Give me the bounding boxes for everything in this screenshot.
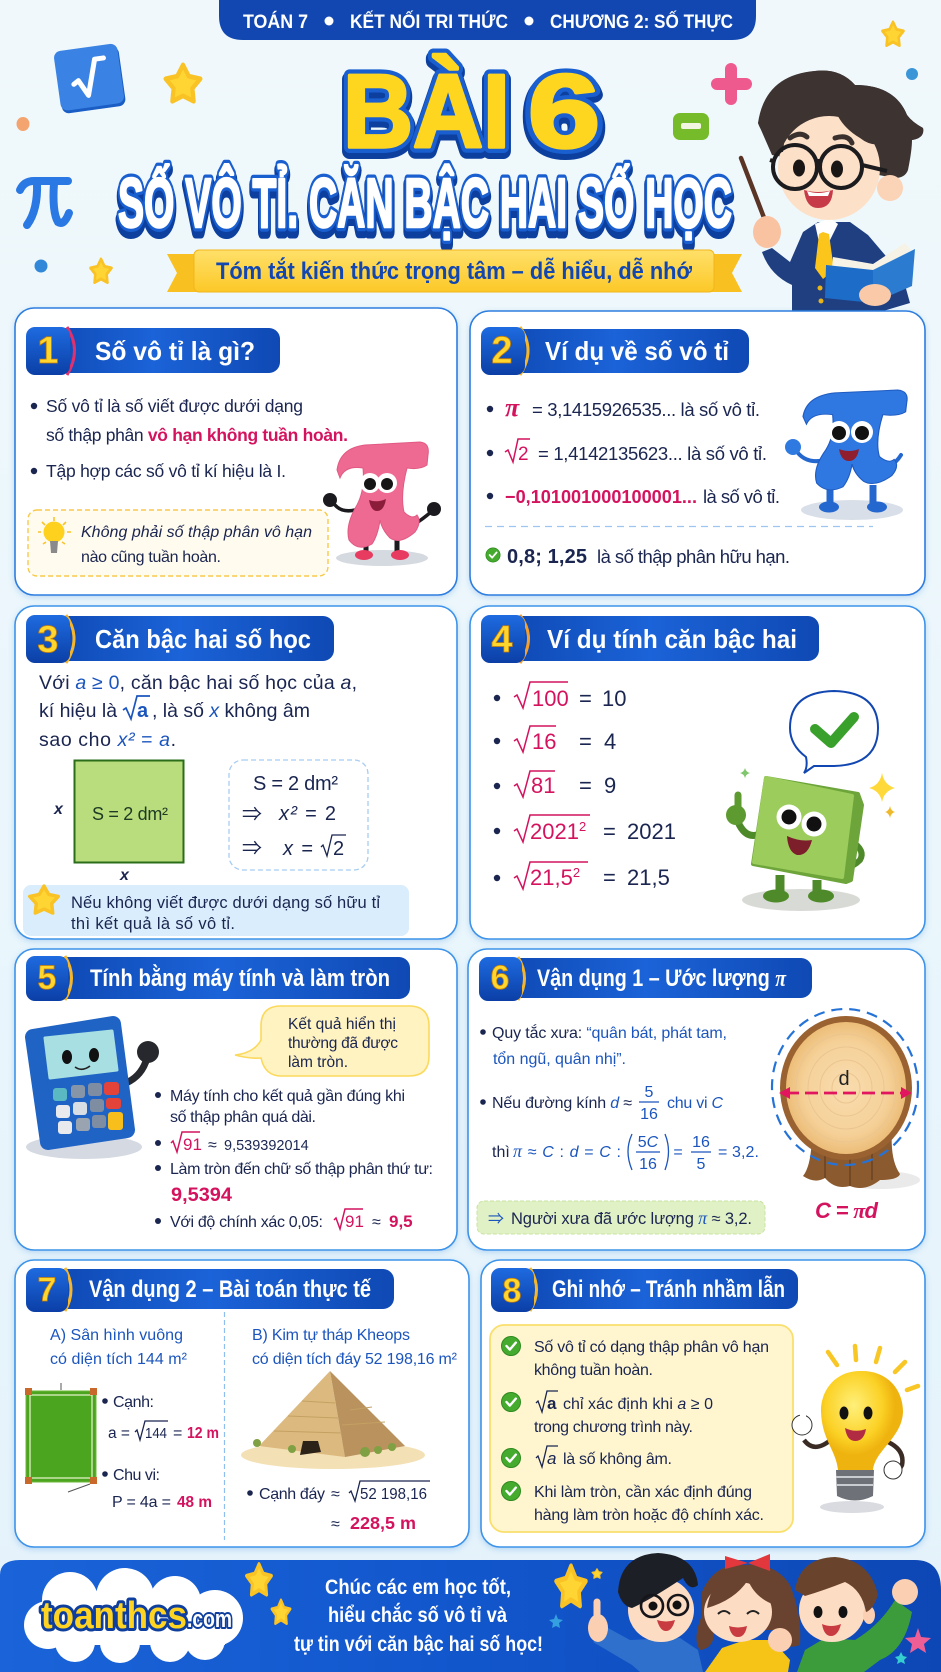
closing message: tự tin với căn bậc hai số học! bbox=[294, 1633, 543, 1656]
top banner: course info: CHƯƠNG 2: SỐ THỰC bbox=[550, 11, 733, 33]
character: pink pi bbox=[323, 442, 441, 566]
root examples: 2 bbox=[579, 819, 586, 834]
calculator notes: 9,539392014 bbox=[224, 1138, 309, 1154]
title: lesson number: 6 bbox=[528, 54, 600, 170]
examples list: 2 bbox=[518, 444, 529, 465]
section header bbox=[26, 615, 334, 663]
section header: Tính bằng máy tính và làm tròn bbox=[90, 964, 390, 992]
character: boy in green hoodie bbox=[795, 1557, 918, 1672]
root examples: 81 bbox=[531, 773, 555, 798]
examples list: = 3,1415926535... là số vô tỉ. bbox=[532, 399, 760, 420]
top banner: course info: KẾT NỐI TRI THỨC bbox=[350, 11, 508, 33]
root examples: 9 bbox=[604, 773, 616, 798]
subtitle ribbon: Tóm tắt kiến thức trọng tâm – dễ hiểu, dễ nhớ bbox=[216, 257, 693, 285]
section header bbox=[479, 957, 812, 1001]
eyes bbox=[793, 160, 843, 178]
part B answers bbox=[247, 1481, 430, 1533]
section header: 1 bbox=[37, 330, 59, 372]
glasses bbox=[770, 145, 887, 189]
callout: note: nào cũng tuần hoàn. bbox=[81, 549, 221, 566]
calculator notes: Với độ chính xác 0,05: bbox=[170, 1214, 323, 1231]
calculator notes: 9,5394 bbox=[171, 1185, 232, 1206]
reminders box bbox=[490, 1325, 793, 1532]
speech bubble with check bbox=[790, 691, 878, 773]
footer bbox=[0, 1553, 941, 1672]
calculator notes: 9,5 bbox=[389, 1212, 413, 1231]
title: lesson number: 6 bbox=[528, 54, 600, 170]
character: boy with glasses bbox=[588, 1553, 703, 1672]
illustration: tree log with diameter: d bbox=[838, 1068, 850, 1090]
old rule text: Quy tắc xưa: “quân bát, phát tam, bbox=[492, 1023, 727, 1042]
top banner: course info: TOÁN 7 bbox=[243, 11, 308, 33]
calculator notes bbox=[155, 1088, 433, 1231]
icon: star bbox=[166, 65, 200, 101]
title: lesson number: BÀI bbox=[343, 54, 510, 170]
icon: plus sign bbox=[717, 69, 746, 99]
calculator notes: số thập phân quá dài. bbox=[170, 1109, 316, 1126]
part A answers bbox=[102, 1394, 219, 1511]
stars bbox=[247, 1564, 931, 1664]
root examples: 16 bbox=[532, 729, 556, 754]
part B heading bbox=[252, 1327, 458, 1368]
definition list bbox=[31, 396, 348, 481]
panel frame bbox=[15, 949, 457, 1250]
speech bubble: thường đã được bbox=[288, 1035, 398, 1052]
reminders box: a bbox=[547, 1394, 557, 1413]
section header bbox=[491, 1268, 798, 1312]
panel 2 bbox=[470, 311, 925, 595]
part A heading bbox=[50, 1327, 188, 1368]
panel frame bbox=[15, 1260, 469, 1547]
old rule text: Nếu đường kính d ≈ bbox=[492, 1095, 632, 1112]
root examples: 21,5 bbox=[530, 865, 573, 890]
note: star tip bbox=[23, 885, 409, 936]
definition list: Số vô tỉ là số viết được dưới dạng bbox=[46, 396, 303, 416]
calculator notes: Làm tròn đến chữ số thập phân thứ tư: bbox=[170, 1161, 433, 1178]
back hair bbox=[758, 71, 923, 178]
jacket buttons bbox=[818, 286, 824, 304]
old rule text: tổn ngũ, quân nhị”. bbox=[493, 1050, 626, 1068]
hand with pointer bbox=[753, 216, 781, 248]
definition text bbox=[39, 672, 357, 751]
character: calculator bbox=[26, 1024, 159, 1159]
section header: 3 bbox=[37, 619, 59, 661]
closing message bbox=[294, 1576, 543, 1656]
section header bbox=[481, 615, 819, 663]
old rule text: 5 bbox=[645, 1084, 654, 1101]
section header: Vận dụng 2 – Bài toán thực tế bbox=[89, 1276, 372, 1303]
diagram: green square bbox=[53, 760, 184, 884]
finite decimal note: là số thập phân hữu hạn. bbox=[597, 546, 790, 567]
panel 8 bbox=[481, 1260, 925, 1547]
definition list: số thập phân vô hạn không tuần hoàn. bbox=[46, 425, 348, 445]
root examples: 10 bbox=[602, 686, 626, 711]
divider bbox=[485, 526, 873, 528]
estimate of pi formula: 5C bbox=[638, 1134, 659, 1151]
logo cloud: toanthcs bbox=[41, 1595, 187, 1637]
part A answers: 48 m bbox=[177, 1494, 212, 1511]
panel frame bbox=[15, 308, 457, 595]
callout: note: Không phải số thập phân vô hạn bbox=[81, 524, 312, 541]
root examples bbox=[494, 682, 676, 890]
top banner: course info bbox=[219, 0, 756, 40]
icon: light bulb bbox=[38, 517, 71, 553]
illustration: pyramid bbox=[241, 1371, 425, 1469]
examples list bbox=[487, 393, 780, 507]
part A heading: có diện tích 144 m² bbox=[50, 1351, 188, 1368]
estimate of pi formula: 16 bbox=[639, 1156, 657, 1173]
conclusion box bbox=[477, 1201, 765, 1234]
section header: Ví dụ về số vô tỉ bbox=[545, 336, 729, 366]
title: lesson number: 6 bbox=[528, 58, 600, 174]
icon: minus tile bbox=[673, 113, 709, 140]
character: blue pi bbox=[785, 390, 907, 520]
icon: square root tile bbox=[53, 43, 126, 114]
part A answers: = bbox=[173, 1425, 182, 1442]
old rule text bbox=[480, 1023, 727, 1123]
part A answers: 144 bbox=[145, 1426, 167, 1442]
character: teacher bbox=[741, 71, 923, 312]
calculator notes: 91 bbox=[183, 1135, 202, 1154]
box: worked steps bbox=[229, 760, 368, 870]
part A answers: Cạnh: bbox=[113, 1394, 154, 1411]
estimate of pi formula: = bbox=[673, 1144, 683, 1161]
conclusion box: ⇒ bbox=[488, 1211, 504, 1228]
panel frame bbox=[481, 1260, 925, 1547]
panel 3 bbox=[15, 606, 457, 939]
icon: blue dot bbox=[34, 260, 48, 272]
section header bbox=[26, 956, 410, 1001]
part A answers: 12 m bbox=[187, 1425, 219, 1442]
part B answers: Cạnh đáy bbox=[259, 1486, 325, 1503]
calculator notes: 91 bbox=[345, 1212, 364, 1231]
panel frame bbox=[468, 949, 925, 1250]
old rule text: chu vi C bbox=[667, 1095, 723, 1112]
section header: Ví dụ tính căn bậc hai bbox=[547, 624, 797, 654]
reminders box: trong chương trình này. bbox=[534, 1419, 693, 1436]
panel 7 bbox=[15, 1260, 469, 1547]
title: lesson number: BÀI bbox=[343, 54, 510, 170]
icon: orange dot bbox=[16, 117, 30, 131]
speech bubble: làm tròn. bbox=[288, 1054, 348, 1071]
character: light bulb bbox=[792, 1346, 918, 1513]
estimate of pi formula: 5 bbox=[697, 1156, 706, 1173]
reminders box: hàng làm tròn hoặc độ chính xác. bbox=[534, 1507, 764, 1524]
sparkles bbox=[740, 768, 895, 818]
box: worked steps: x² = 2 bbox=[278, 803, 336, 825]
panel frame bbox=[15, 606, 457, 939]
panel 6 bbox=[468, 949, 925, 1250]
eyebrows bbox=[790, 134, 852, 143]
calculator notes: Máy tính cho kết quả gần đúng khi bbox=[170, 1088, 405, 1105]
section header: 4 bbox=[491, 619, 513, 661]
estimate of pi formula: = 3,2. bbox=[718, 1144, 759, 1161]
note: star tip: Nếu không viết được dưới dạng số hữu tỉ bbox=[71, 894, 380, 912]
section header: Căn bậc hai số học bbox=[95, 624, 311, 654]
section header: Số vô tỉ là gì? bbox=[95, 336, 255, 366]
illustration: tree log with diameter bbox=[772, 1009, 920, 1189]
root examples: = bbox=[603, 865, 616, 890]
formula: circumference: C = πd bbox=[815, 1198, 879, 1223]
root examples: = bbox=[603, 819, 616, 844]
panel frame bbox=[470, 606, 925, 939]
divider bbox=[224, 1312, 226, 1540]
note: star tip: thì kết quả là số vô tỉ. bbox=[71, 915, 235, 933]
footer background bbox=[0, 1560, 941, 1672]
reminders box: Số vô tỉ có dạng thập phân vô hạn bbox=[534, 1339, 769, 1356]
old rule text: 16 bbox=[640, 1106, 658, 1123]
calculator notes: ≈ bbox=[208, 1137, 217, 1154]
panel 4 bbox=[470, 606, 925, 939]
part A answers: P = 4a = bbox=[112, 1494, 171, 1511]
part B answers: ≈ bbox=[331, 1516, 340, 1533]
section header: 5 bbox=[38, 959, 56, 997]
box: worked steps: 2 bbox=[333, 838, 344, 860]
finite decimal note bbox=[486, 546, 790, 568]
icon: small star bbox=[90, 259, 112, 282]
section header: Ghi nhớ – Tránh nhầm lẫn bbox=[552, 1275, 785, 1303]
part B answers: ≈ bbox=[331, 1486, 340, 1503]
examples list: = 1,4142135623... là số vô tỉ. bbox=[538, 443, 767, 464]
root examples: 2021 bbox=[530, 819, 579, 844]
reminders box: không tuần hoàn. bbox=[534, 1362, 653, 1379]
definition text: , là số x không âm bbox=[152, 700, 310, 722]
character: girl with bow bbox=[696, 1554, 800, 1672]
panel 5 bbox=[15, 949, 457, 1250]
section header: 7 bbox=[38, 1271, 56, 1309]
open book bbox=[832, 243, 911, 272]
root examples: = bbox=[579, 686, 592, 711]
estimate of pi formula bbox=[492, 1134, 759, 1173]
diagram: green square: S = 2 dm² bbox=[92, 804, 168, 824]
estimate of pi formula: π ≈ C : d = C : bbox=[513, 1141, 621, 1161]
section header: 2 bbox=[491, 330, 513, 372]
definition text: a bbox=[137, 700, 149, 722]
panel 1 bbox=[15, 308, 457, 595]
icon: pi symbol bbox=[20, 181, 69, 225]
pointer stick bbox=[741, 158, 773, 241]
section header bbox=[481, 327, 749, 375]
box: worked steps: S = 2 dm² bbox=[253, 773, 338, 795]
mouth bbox=[804, 190, 833, 208]
reminders box: chỉ xác định khi a ≥ 0 bbox=[563, 1396, 713, 1413]
illustration: square field bbox=[25, 1383, 97, 1492]
definition list: Tập hợp các số vô tỉ kí hiệu là I. bbox=[46, 461, 286, 481]
finite decimal note: 0,8; 1,25 bbox=[507, 546, 587, 568]
ear bbox=[877, 175, 903, 201]
section header: 8 bbox=[503, 1272, 521, 1310]
root examples: 21,5 bbox=[627, 865, 670, 890]
conclusion box: Người xưa đã ước lượng π ≈ 3,2. bbox=[511, 1208, 752, 1228]
box: worked steps: x = bbox=[282, 838, 313, 860]
suit body bbox=[762, 222, 910, 312]
part A answers: Chu vi: bbox=[113, 1467, 160, 1484]
box: worked steps: ⇒ bbox=[242, 838, 262, 860]
logo cloud bbox=[24, 1568, 243, 1663]
section header: Vận dụng 1 – Ước lượng π bbox=[537, 965, 787, 992]
root examples: 4 bbox=[604, 729, 616, 754]
examples list: −0,101001000100001... bbox=[505, 486, 697, 507]
icon: top right star bbox=[882, 22, 904, 46]
subtitle ribbon bbox=[167, 250, 742, 292]
examples list: là số vô tỉ. bbox=[703, 486, 780, 507]
part A heading: A) Sân hình vuông bbox=[50, 1327, 183, 1344]
diagram: green square: x bbox=[53, 801, 64, 818]
part B answers: 228,5 m bbox=[350, 1513, 416, 1533]
definition text: kí hiệu là bbox=[39, 700, 117, 722]
face bbox=[778, 116, 880, 220]
root examples: 2 bbox=[573, 865, 580, 880]
reminders box: là số không âm. bbox=[563, 1451, 672, 1468]
part A answers: a = bbox=[108, 1425, 130, 1442]
root examples: = bbox=[579, 773, 592, 798]
calculator notes: ≈ bbox=[372, 1214, 381, 1231]
callout: note bbox=[28, 510, 328, 576]
root examples: 2021 bbox=[627, 819, 676, 844]
panel frame bbox=[470, 311, 925, 595]
part B heading: có diện tích đáy 52 198,16 m² bbox=[252, 1351, 458, 1368]
part B heading: B) Kim tự tháp Kheops bbox=[252, 1327, 410, 1344]
reminders box: a bbox=[547, 1449, 556, 1468]
closing message: hiểu chắc số vô tỉ và bbox=[328, 1603, 507, 1627]
definition text: Với a ≥ 0, căn bậc hai số học của a, bbox=[39, 672, 357, 694]
definition text: sao cho x² = a. bbox=[39, 729, 176, 751]
speech bubble: Kết quả hiển thị bbox=[288, 1016, 396, 1033]
hair fringe bbox=[758, 71, 923, 152]
examples list: π bbox=[505, 393, 520, 422]
icon: top right dot bbox=[906, 68, 918, 80]
section header: 6 bbox=[491, 959, 509, 997]
logo cloud: .com bbox=[187, 1606, 232, 1633]
hand on book bbox=[859, 284, 891, 306]
section header bbox=[26, 1268, 394, 1312]
estimate of pi formula: thì bbox=[492, 1144, 510, 1161]
part B answers: 52 198,16 bbox=[360, 1486, 427, 1503]
character: green square bbox=[726, 778, 862, 911]
root examples: = bbox=[579, 729, 592, 754]
section header bbox=[26, 327, 280, 375]
reminders box: Khi làm tròn, cần xác định đúng bbox=[534, 1484, 752, 1501]
title: lesson number bbox=[343, 54, 600, 174]
closing message: Chúc các em học tốt, bbox=[325, 1576, 511, 1599]
estimate of pi formula: 16 bbox=[692, 1134, 710, 1151]
root examples: 100 bbox=[532, 686, 569, 711]
speech bubble bbox=[235, 1006, 429, 1076]
diagram: green square: x bbox=[119, 867, 130, 884]
box: worked steps: ⇒ bbox=[242, 804, 262, 826]
title: lesson number: BÀI bbox=[343, 58, 510, 174]
